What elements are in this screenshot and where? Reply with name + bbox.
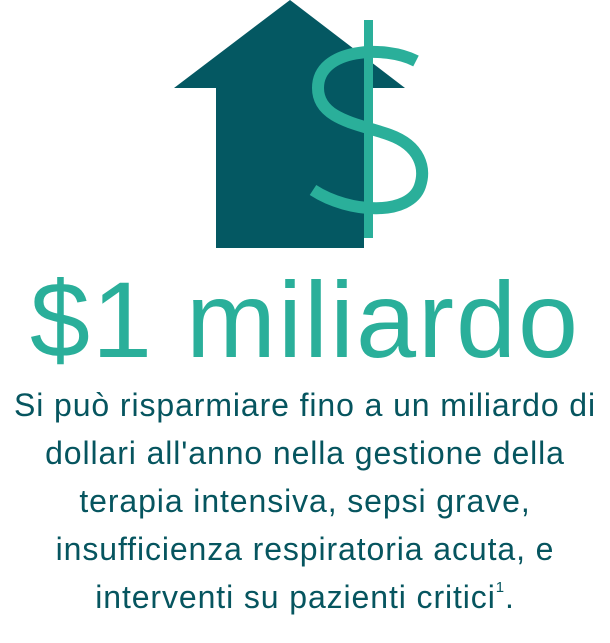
headline: $1 miliardo xyxy=(30,259,580,380)
dollar sign xyxy=(313,20,422,238)
text block: description: insufficienza respiratoria acuta, e xyxy=(56,531,554,567)
icon: up arrow with dollar xyxy=(174,0,428,248)
arrow xyxy=(174,0,405,248)
text block: description: interventi su pazienti critici1. xyxy=(95,579,515,615)
text block: description: Si può risparmiare fino a un miliardo di xyxy=(14,387,596,423)
text block: description xyxy=(14,387,596,615)
text block: description: terapia intensiva, sepsi grave, xyxy=(79,483,531,519)
text block: description: dollari all'anno nella gestione della xyxy=(45,435,565,471)
